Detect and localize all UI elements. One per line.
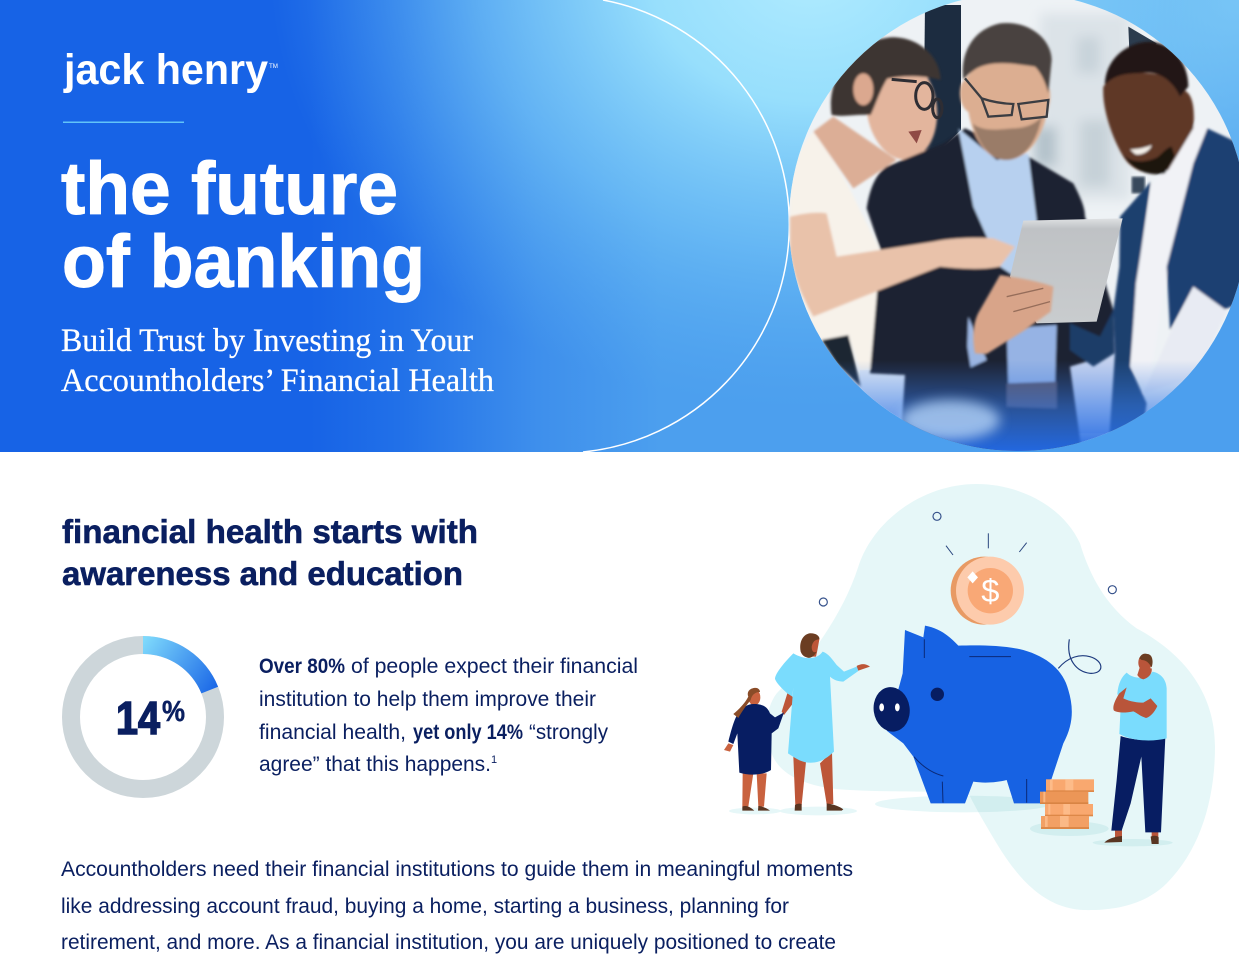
body paragraph: retirement, and more. As a financial institution, you are uniquely positioned to create: [61, 931, 836, 954]
coin stack: [1040, 779, 1094, 829]
statistic paragraph: yet only 14%: [413, 721, 523, 744]
subtitle: [61, 323, 494, 399]
title: the future: [61, 147, 398, 230]
person: child in navy dress: [724, 688, 784, 811]
small circles: [819, 512, 1116, 606]
subtitle: Accountholders’ Financial Health: [61, 363, 494, 399]
tablet: [1010, 218, 1123, 323]
statistic paragraph: “strongly: [529, 721, 608, 744]
banner background gradient: [0, 0, 1239, 452]
statistic paragraph: 1: [491, 754, 497, 766]
body paragraph: Accountholders need their financial institutions to guide them in meaningful moments: [61, 858, 853, 881]
background blob: [767, 484, 1215, 910]
piggy bank: [871, 626, 1101, 803]
statistic paragraph: agree” that this happens.: [259, 753, 491, 776]
icon: dollar coin: $: [981, 572, 999, 609]
logo: jack henry: TM: [269, 64, 278, 70]
statistic paragraph: financial health,: [259, 721, 406, 744]
section heading: [62, 513, 478, 592]
statistic paragraph: Over 80%: [259, 655, 345, 678]
donut value: %: [162, 696, 185, 728]
title: [61, 147, 425, 303]
donut highlighted segment: [143, 636, 218, 693]
statistic paragraph: institution to help them improve their: [259, 688, 596, 711]
coin rays: [946, 533, 1027, 555]
centre man: [867, 128, 1114, 451]
photo: three colleagues looking at a tablet: [780, 0, 1239, 457]
illustration: family, piggy bank and coins: [724, 484, 1215, 910]
right man: [1108, 182, 1151, 451]
person: woman in blue dress: [775, 633, 870, 811]
section heading: awareness and education: [62, 555, 463, 592]
body paragraph: like addressing account fraud, buying a home, starting a business, planning for: [61, 895, 789, 918]
donut chart: 14%: [71, 636, 218, 789]
decorative white arc: [583, 0, 789, 452]
woman's arm: [790, 213, 1015, 317]
subtitle: Build Trust by Investing in Your: [61, 323, 473, 359]
body paragraph: [61, 858, 853, 954]
title: of banking: [62, 220, 425, 303]
person: man with crossed arms: [1104, 654, 1167, 844]
woman: [813, 117, 897, 188]
logo: jack henry: jack henry: [63, 46, 268, 94]
donut value: 14: [116, 692, 160, 744]
section heading: financial health starts with: [62, 513, 478, 550]
ground shadows: [729, 796, 1173, 846]
icon: dollar coin: [951, 557, 1024, 625]
header banner: [0, 0, 1239, 457]
statistic paragraph: of people expect their financial: [351, 655, 638, 678]
statistic paragraph: [259, 655, 638, 776]
